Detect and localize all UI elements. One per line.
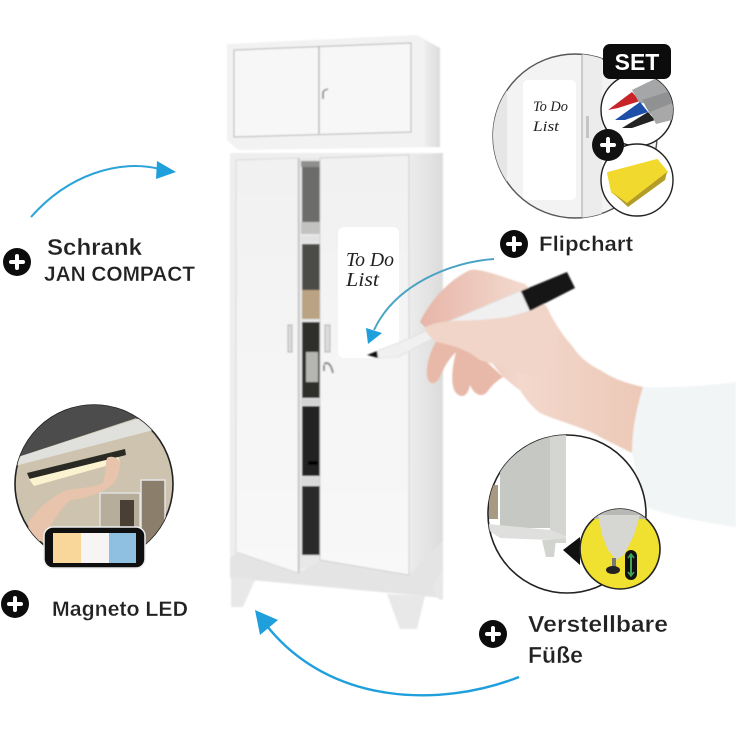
label: Verstellbare Füße: Füße bbox=[528, 642, 583, 668]
label: Magneto LED bbox=[1, 590, 188, 621]
sleeve bbox=[632, 382, 736, 527]
plinth bbox=[230, 540, 443, 598]
label: Flipchart bbox=[500, 230, 633, 258]
label: Schrank: Schrank bbox=[47, 234, 142, 260]
handwritten text: To Do List: To Do bbox=[346, 249, 394, 271]
hand holding marker bbox=[367, 270, 736, 527]
label: Schrank bbox=[3, 234, 195, 286]
left door bbox=[236, 158, 298, 573]
marker set circle bbox=[600, 79, 674, 145]
door handles bbox=[288, 325, 330, 352]
arrow: to top cabinet bbox=[31, 161, 176, 217]
label: Magneto LED: Magneto LED bbox=[52, 598, 188, 621]
height adjustment indicator bbox=[625, 550, 637, 580]
label: Verstellbare Füße: Verstellbare bbox=[528, 611, 668, 637]
panel: LED circle bbox=[15, 400, 173, 568]
index finger and back of hand bbox=[420, 270, 643, 453]
panel: flipchart circle bbox=[493, 44, 680, 218]
SET badge bbox=[603, 44, 671, 79]
label: Schrank: JAN COMPACT bbox=[44, 263, 195, 286]
panel: flipchart circle: List bbox=[532, 119, 560, 135]
top cabinet bbox=[227, 35, 440, 150]
marker bbox=[367, 272, 575, 358]
lower cabinet body bbox=[230, 153, 443, 598]
lower fingers bbox=[427, 340, 503, 396]
arrow: flipchart to board bbox=[366, 259, 494, 344]
cabinet feet bbox=[231, 570, 443, 629]
yellow foot inset bbox=[580, 505, 660, 589]
key lock bbox=[324, 363, 333, 373]
right door bbox=[320, 155, 409, 575]
eraser circle bbox=[601, 144, 673, 216]
plus badge bbox=[592, 129, 624, 161]
thumb over marker bbox=[425, 310, 560, 380]
whiteboard flipchart on door bbox=[338, 227, 399, 358]
label: Verstellbare Füße bbox=[479, 611, 668, 668]
colour temperature swatch bbox=[44, 527, 145, 568]
cabinet interior shelves bbox=[298, 158, 322, 568]
cabinet illustration bbox=[227, 35, 443, 629]
handwritten text: To Do List: To Do bbox=[533, 99, 568, 115]
panel: adjustable feet circle bbox=[488, 435, 660, 593]
arrow: feet to cabinet bbox=[255, 610, 519, 695]
label: Flipchart: Flipchart bbox=[539, 233, 633, 256]
whiteboard flipchart on door: List bbox=[345, 269, 379, 291]
SET badge: SET bbox=[615, 49, 659, 75]
